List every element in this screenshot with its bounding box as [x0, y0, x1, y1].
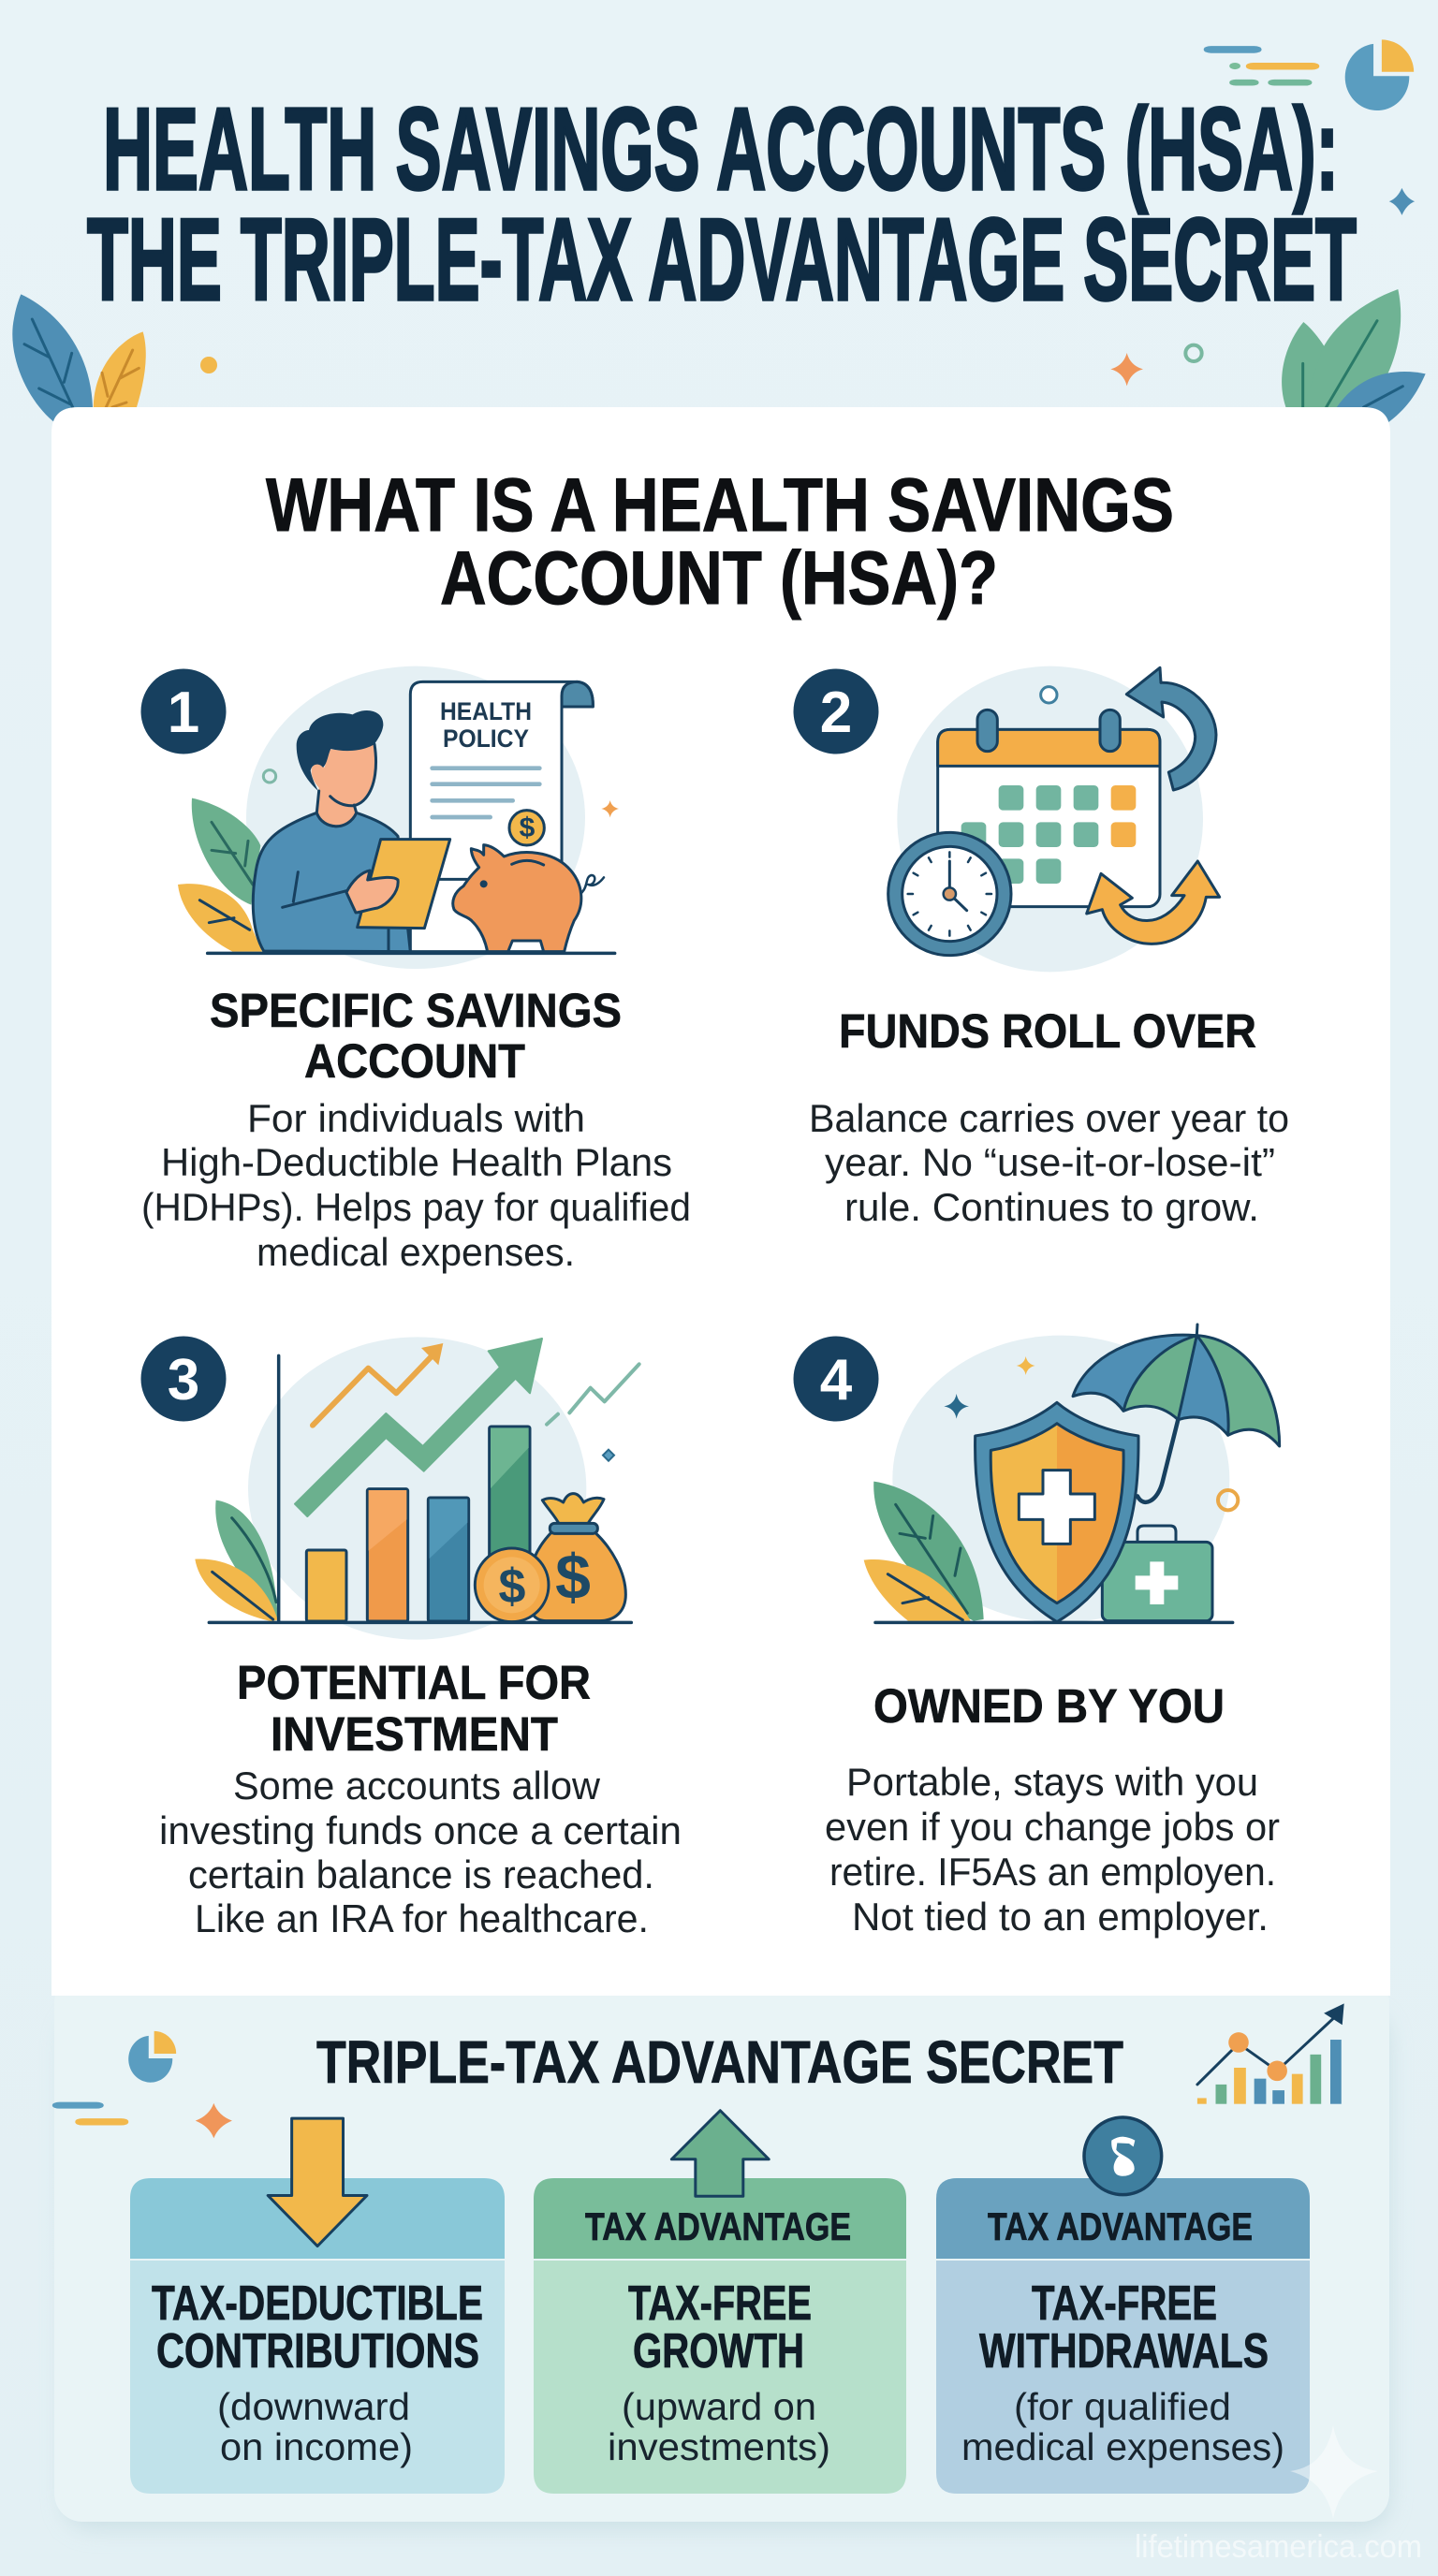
panel: lower tax section background [54, 1975, 1389, 2529]
item 4: owned by you: retire. IF5As an employen. [829, 1850, 1276, 1894]
card: tax-free growth: (upward on [622, 2385, 816, 2428]
item 2: funds roll over: Balance carries over year to [809, 1096, 1289, 1140]
item 3: potential for investment: Like an IRA for healthcare. [195, 1896, 649, 1940]
item 3: potential for investment: $ [499, 1559, 526, 1614]
card: tax-deductible contributions: TAX-DEDUCTIBLE [152, 2276, 483, 2331]
panel: what is an HSA [51, 407, 1390, 1996]
item 1: specific savings account [140, 666, 691, 1274]
badge: number 1 [140, 668, 227, 754]
item 1: specific savings account: For individuals with [247, 1096, 585, 1140]
watermark sparkle [1290, 2425, 1378, 2519]
badge: number 2 [794, 668, 878, 754]
icon: down arrow [268, 2118, 367, 2247]
item 3: potential for investment: certain balance is reached. [188, 1852, 654, 1896]
card: tax-free withdrawals: (for qualified [1014, 2385, 1231, 2428]
item 1: specific savings account: ACCOUNT [304, 1034, 525, 1088]
item 1: specific savings account: medical expenses. [257, 1230, 575, 1274]
heading: triple-tax advantage secret: TRIPLE-TAX ADVANTAGE SECRET [316, 2028, 1123, 2096]
item 1: specific savings account: $ [520, 812, 536, 843]
decoration: right leaves, star and ring [1110, 289, 1426, 424]
icon: money badge [1084, 2117, 1162, 2195]
title [87, 85, 1357, 325]
decoration: lower section icons [52, 2003, 1344, 2138]
heading: what is a health savings account: WHAT IS A HEALTH SAVINGS [266, 463, 1174, 548]
card: tax-free withdrawals [936, 2117, 1310, 2494]
badge: number 1: 1 [168, 681, 199, 745]
card: tax-free growth: TAX ADVANTAGE [585, 2204, 851, 2248]
card: tax-deductible contributions: CONTRIBUTIONS [156, 2324, 479, 2378]
badge: number 4: 4 [820, 1348, 853, 1412]
item 4: owned by you: OWNED BY YOU [873, 1679, 1225, 1733]
item 3: potential for investment [140, 1337, 682, 1940]
watermark: lifetimesamerica.com [1135, 2529, 1422, 2565]
item 3: potential for investment: Some accounts allow [233, 1764, 601, 1808]
card: tax-free growth: investments) [608, 2425, 830, 2468]
item 4: owned by you: Portable, stays with you [846, 1760, 1258, 1804]
decoration: top right chart icons [1204, 39, 1415, 215]
badge: number 2: 2 [820, 681, 852, 745]
item 3: potential for investment: POTENTIAL FOR [237, 1656, 591, 1709]
badge: number 3: 3 [168, 1348, 199, 1412]
item 3: potential for investment: INVESTMENT [271, 1707, 558, 1761]
icon: person with health policy and piggy bank [178, 666, 619, 969]
item 4: owned by you: Not tied to an employer. [852, 1895, 1269, 1939]
item 4: owned by you: even if you change jobs or [825, 1805, 1280, 1849]
item 2: funds roll over [794, 666, 1289, 1229]
card: tax-deductible contributions: on income) [220, 2425, 413, 2468]
decoration: left leaves and dot [12, 294, 217, 424]
item 2: funds roll over: year. No “use-it-or-lose-it” [825, 1140, 1275, 1184]
card: tax-free withdrawals: TAX ADVANTAGE [988, 2204, 1253, 2248]
badge: number 4 [794, 1337, 878, 1421]
item 4: owned by you [794, 1325, 1280, 1939]
item 1: specific savings account: (HDHPs). Helps pay for qualified [141, 1185, 691, 1229]
badge: number 3 [140, 1337, 227, 1421]
heading: what is a health savings account: ACCOUNT (HSA)? [440, 536, 998, 621]
card: tax-free withdrawals: TAX-FREE [1032, 2276, 1217, 2331]
item 2: funds roll over: FUNDS ROLL OVER [839, 1004, 1256, 1058]
item 1: specific savings account: POLICY [443, 724, 529, 753]
card: tax-free withdrawals: medical expenses) [961, 2425, 1284, 2468]
item 3: potential for investment: investing funds once a certain [159, 1808, 682, 1852]
card: tax-free growth [534, 2111, 906, 2494]
item 3: potential for investment: $ [555, 1542, 591, 1613]
item 1: specific savings account: HEALTH [440, 697, 532, 725]
card: tax-free growth: GROWTH [633, 2324, 804, 2378]
card: tax-free withdrawals: WITHDRAWALS [979, 2324, 1269, 2378]
card: tax-deductible contributions: (downward [217, 2385, 410, 2428]
icon: up arrow [671, 2111, 769, 2196]
card: tax-deductible contributions [130, 2118, 505, 2494]
item 2: funds roll over: rule. Continues to grow. [844, 1185, 1259, 1229]
item 1: specific savings account: SPECIFIC SAVINGS [210, 984, 622, 1037]
card: tax-free growth: TAX-FREE [628, 2276, 812, 2331]
item 1: specific savings account: High-Deductible Health Plans [161, 1140, 672, 1184]
icon: shield, umbrella and first aid case [864, 1325, 1280, 1622]
heading: what is a health savings account [266, 463, 1174, 621]
icon: growth chart with money bag [195, 1337, 639, 1640]
icon: calendar with clock and arrows [888, 666, 1220, 972]
